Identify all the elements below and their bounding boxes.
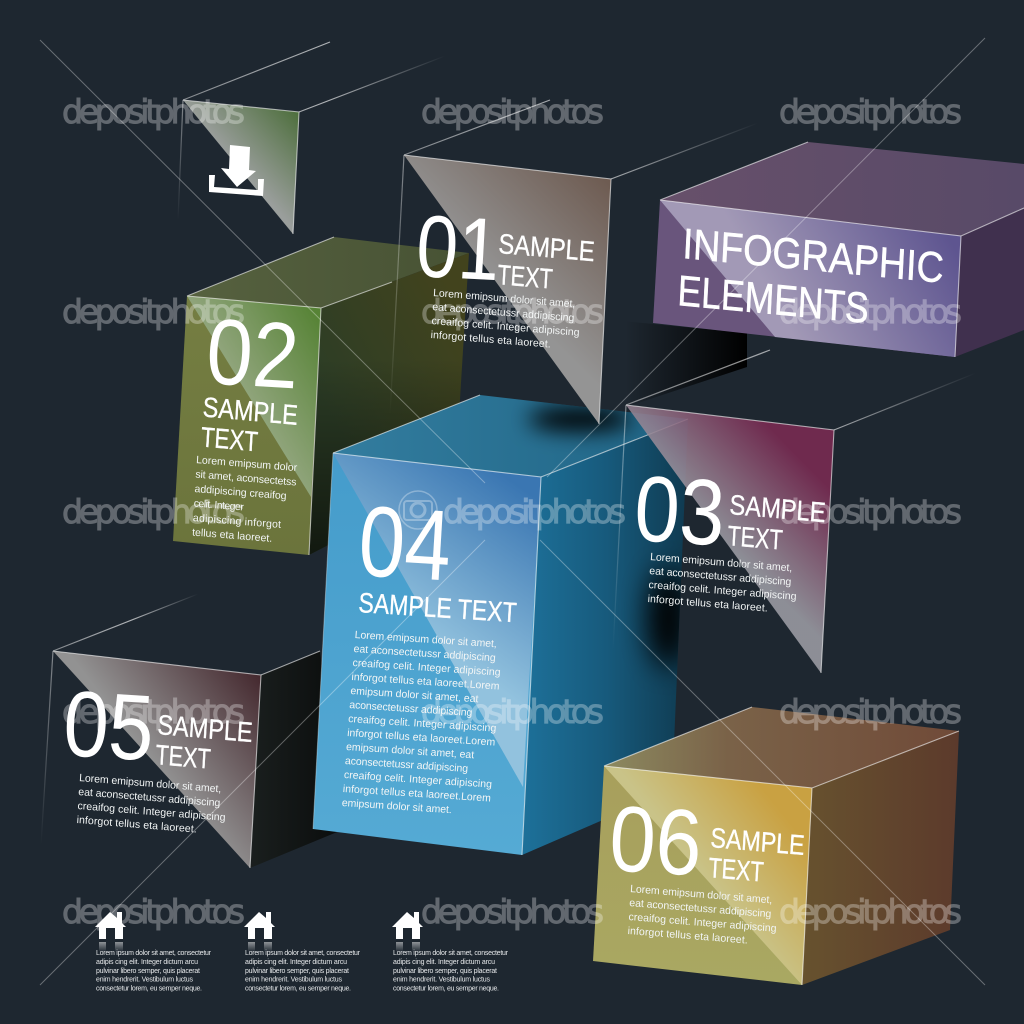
heading: sample text 02	[200, 391, 299, 461]
watermarks: depositphotos	[779, 692, 962, 731]
body text 04: emipsum dolor sit amet, eat	[346, 741, 475, 761]
body text 05: eat aconsectetussr addipiscing	[78, 786, 221, 809]
footer item 2: house and text	[244, 912, 361, 992]
body text 05: inforgot tellus eta laoreet.	[76, 814, 197, 836]
watermarks: depositphotos	[421, 892, 604, 931]
footer item 3: house and text: consectetur lorem, eu semper neque.	[393, 986, 499, 992]
body text 05	[76, 772, 228, 838]
watermarks	[62, 92, 962, 931]
number 01: 01	[414, 196, 502, 299]
icon: download arrow	[209, 145, 264, 196]
watermarks: depositphotos	[421, 292, 604, 331]
watermarks: depositphotos	[421, 92, 604, 131]
body text 01: eat aconsectetussr addipiscing	[432, 301, 575, 324]
heading: sample text 02: TEXT	[200, 421, 259, 457]
number 05: 05	[61, 671, 157, 780]
body text 04: eat aconsectetussr addipiscing	[353, 643, 496, 664]
icon: house	[95, 912, 126, 952]
footer item 3: house and text: enim hendrerit. Vestibulum luctus	[393, 976, 490, 984]
watermarks: depositphotos	[62, 292, 245, 331]
panel: cube 01: TEXT	[497, 259, 553, 295]
body text 04: inforgot tellus eta laoreet.Lorem	[347, 727, 496, 749]
body text 03: eat aconsectetussr addipiscing	[649, 565, 792, 588]
footer item 1: house and text: pulvinar libero semper, quis placerat	[96, 968, 200, 975]
panel: cube 01	[390, 100, 758, 424]
footer item 1: house and text	[95, 912, 212, 992]
body text 02: tellus eta laoreet.	[192, 527, 273, 545]
body text 03: creaifog celit. Integer adipiscing	[648, 579, 797, 603]
body text 06: creaifog celit. Integer adipiscing	[628, 911, 777, 935]
body text 04: aconsectetussr addipiscing	[345, 755, 469, 775]
body text 01: Lorem emipsum dolor sit amet,	[433, 287, 576, 310]
footer item 2: house and text: pulvinar libero semper, quis placerat	[245, 968, 349, 975]
watermarks: depositphotos	[62, 692, 245, 731]
footer item 3: house and text: adipis cing elit. Integer dictum arcu	[393, 959, 495, 966]
cube 05 side face	[250, 651, 342, 868]
body text 03: Lorem emipsum dolor sit amet,	[650, 551, 793, 574]
number 02: 02	[204, 299, 302, 408]
title	[677, 220, 945, 333]
body text 04: inforgot tellus eta laoreet.Lorem	[342, 783, 492, 805]
icon: house	[392, 912, 423, 952]
body text 06: inforgot tellus eta laoreet.	[627, 925, 748, 947]
heading: sample text 05: SAMPLE	[157, 709, 253, 748]
watermarks: depositphotos	[421, 692, 604, 731]
footer item 1: house and text: Lorem ipsum dolor sit amet, consectetur	[96, 950, 212, 957]
body text 04: inforgot tellus eta laoreet.Lorem	[351, 671, 500, 693]
body text 04	[341, 629, 503, 819]
body text 04: creaifog celit. Integer adipiscing	[343, 769, 493, 791]
heading: sample text 01: SAMPLE	[498, 228, 595, 267]
panel: cube 06	[593, 707, 959, 985]
body text 06	[627, 883, 779, 949]
body text 01	[430, 287, 582, 353]
heading: sample text 06: SAMPLE	[710, 822, 805, 861]
footer item 2: house and text: enim hendrerit. Vestibulum luctus	[245, 976, 342, 984]
body text 02	[192, 454, 298, 547]
title: ELEMENTS	[677, 267, 870, 333]
body text 04: creaifog celit. Integer adipiscing	[348, 713, 497, 735]
footer item 3: house and text	[392, 912, 509, 992]
panel: cube 04	[313, 453, 541, 855]
body text 05: Lorem emipsum dolor sit amet,	[79, 772, 222, 795]
footer item 3: house and text: Lorem ipsum dolor sit amet, consectetur	[393, 950, 509, 957]
footer item 2: house and text: adipis cing elit. Integer dictum arcu	[245, 959, 347, 966]
heading: sample text 02: SAMPLE	[202, 391, 299, 431]
body text 04: aconsectetussr addipiscing	[349, 699, 473, 719]
body text 06: eat aconsectetussr addipiscing	[629, 897, 772, 920]
body text 04: creaifog celit. Integer adipiscing	[352, 657, 501, 679]
body text 01: inforgot tellus eta laoreet.	[430, 329, 551, 351]
body text 02: celit. Integer	[193, 498, 245, 514]
body text 02: adipiscing inforgot	[193, 512, 281, 531]
body text 03	[647, 551, 799, 617]
panel: cube 03	[613, 350, 976, 673]
body text 02: sit amet, aconsectetss	[195, 469, 297, 489]
footer item 2: house and text: Lorem ipsum dolor sit amet, consectetur	[245, 950, 361, 957]
icon: house	[244, 912, 275, 952]
watermarks: depositphotos	[779, 492, 962, 531]
watermarks: depositphotos	[779, 292, 962, 331]
body text 04: emipsum dolor sit amet, eat	[350, 685, 479, 705]
body text 02: addipiscing creaifog	[194, 483, 287, 502]
body text 04: emipsum dolor sit amet.	[341, 797, 452, 816]
watermarks: depositphotos	[779, 892, 962, 931]
panel: cube 06: TEXT	[708, 852, 764, 888]
footer item 2: house and text: consectetur lorem, eu semper neque.	[245, 986, 351, 992]
body text 03: inforgot tellus eta laoreet.	[647, 593, 768, 615]
footer item 1: house and text: consectetur lorem, eu semper neque.	[96, 986, 202, 992]
footer item 3: house and text: pulvinar libero semper, quis placerat	[393, 968, 497, 975]
title: INFOGRAPHIC	[682, 220, 945, 293]
body text 01: creaifog celit. Integer adipiscing	[431, 315, 580, 339]
panel: cube 05: TEXT	[155, 739, 211, 775]
panel: cube 05	[41, 594, 261, 868]
body text 02: Lorem emipsum dolor	[196, 454, 298, 474]
heading: sample text 03: SAMPLE	[729, 489, 826, 528]
panel: cube 02	[173, 237, 469, 555]
body text 05: creaifog celit. Integer adipiscing	[77, 800, 226, 824]
panel: cube 03: TEXT	[727, 520, 783, 556]
watermarks: depositphotos	[62, 92, 245, 131]
body text 04: Lorem emipsum dolor sit amet,	[354, 629, 497, 650]
watermarks: depositphotos	[62, 892, 245, 931]
heading: sample text 04: SAMPLE TEXT	[358, 587, 517, 628]
icon panel: download	[178, 42, 445, 234]
body text 06: Lorem emipsum dolor sit amet,	[630, 883, 773, 906]
watermarks: depositphotos	[779, 92, 962, 131]
footer item 1: house and text: adipis cing elit. Integer dictum arcu	[96, 959, 198, 966]
number 06: 06	[607, 786, 705, 895]
panel: title cube	[600, 142, 1024, 407]
cube 04 back faces	[333, 395, 688, 855]
watermarks: depositphotos	[443, 492, 626, 531]
number 03: 03	[632, 456, 728, 565]
footer item 1: house and text: enim hendrerit. Vestibulum luctus	[96, 976, 194, 984]
watermarks: depositphotos	[62, 492, 245, 531]
number 04: 04	[356, 485, 454, 602]
